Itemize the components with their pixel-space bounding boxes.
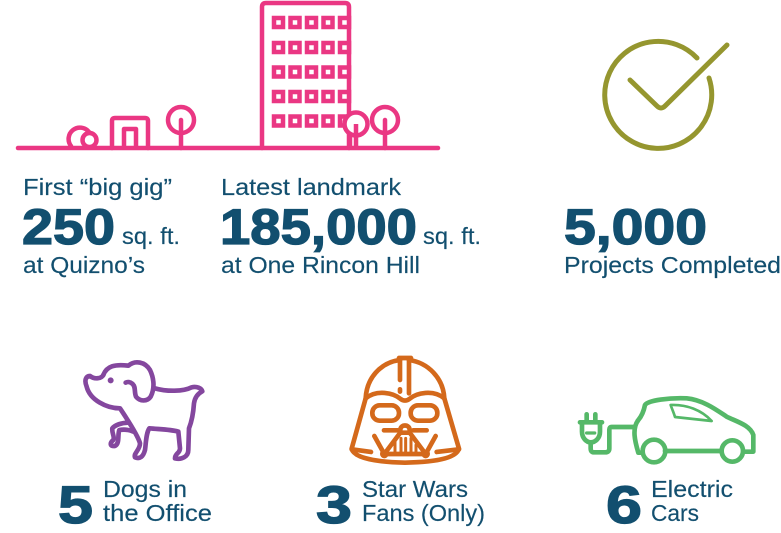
text: 3 star wars fans	[316, 476, 485, 533]
text: 5 dogs in the office: Dogs in	[103, 476, 187, 502]
icon: city skyline	[18, 3, 438, 148]
panel: dogs in the office	[58, 362, 212, 533]
panel: projects completed	[564, 41, 781, 278]
text: 5,000 projects completed	[564, 199, 781, 278]
icon: check mark in circle	[605, 41, 727, 148]
panel: building size comparison	[18, 3, 481, 278]
text: 5 dogs in the office: the Office	[103, 500, 212, 526]
text: 3 star wars fans: Star Wars	[362, 476, 468, 502]
text: latest landmark stat: Latest landmark	[221, 174, 402, 200]
icon: electric car with plug	[580, 398, 753, 462]
text: first big gig stat	[22, 174, 180, 278]
text: 5,000 projects completed: 5,000	[564, 199, 707, 255]
text: first big gig stat: sq. ft.	[122, 223, 180, 249]
text: latest landmark stat: sq. ft.	[423, 223, 481, 249]
panel: electric cars	[580, 398, 753, 533]
text: first big gig stat: First “big gig”	[23, 174, 172, 200]
text: latest landmark stat: 185,000	[220, 199, 417, 255]
panel: star wars fans	[316, 358, 485, 533]
text: latest landmark stat	[220, 174, 481, 278]
text: 6 electric cars	[606, 476, 733, 533]
icon: dog	[85, 362, 202, 459]
text: 6 electric cars: Cars	[651, 500, 699, 526]
text: first big gig stat: at Quizno’s	[23, 252, 145, 278]
text: 6 electric cars: Electric	[651, 476, 733, 502]
icon: darth vader helmet	[352, 358, 459, 463]
text: 3 star wars fans: Fans (Only)	[362, 500, 485, 526]
text: 5 dogs in the office	[58, 476, 212, 533]
text: 5,000 projects completed: Projects Completed	[564, 252, 781, 278]
text: first big gig stat: 250	[22, 199, 115, 255]
text: latest landmark stat: at One Rincon Hill	[221, 252, 420, 278]
